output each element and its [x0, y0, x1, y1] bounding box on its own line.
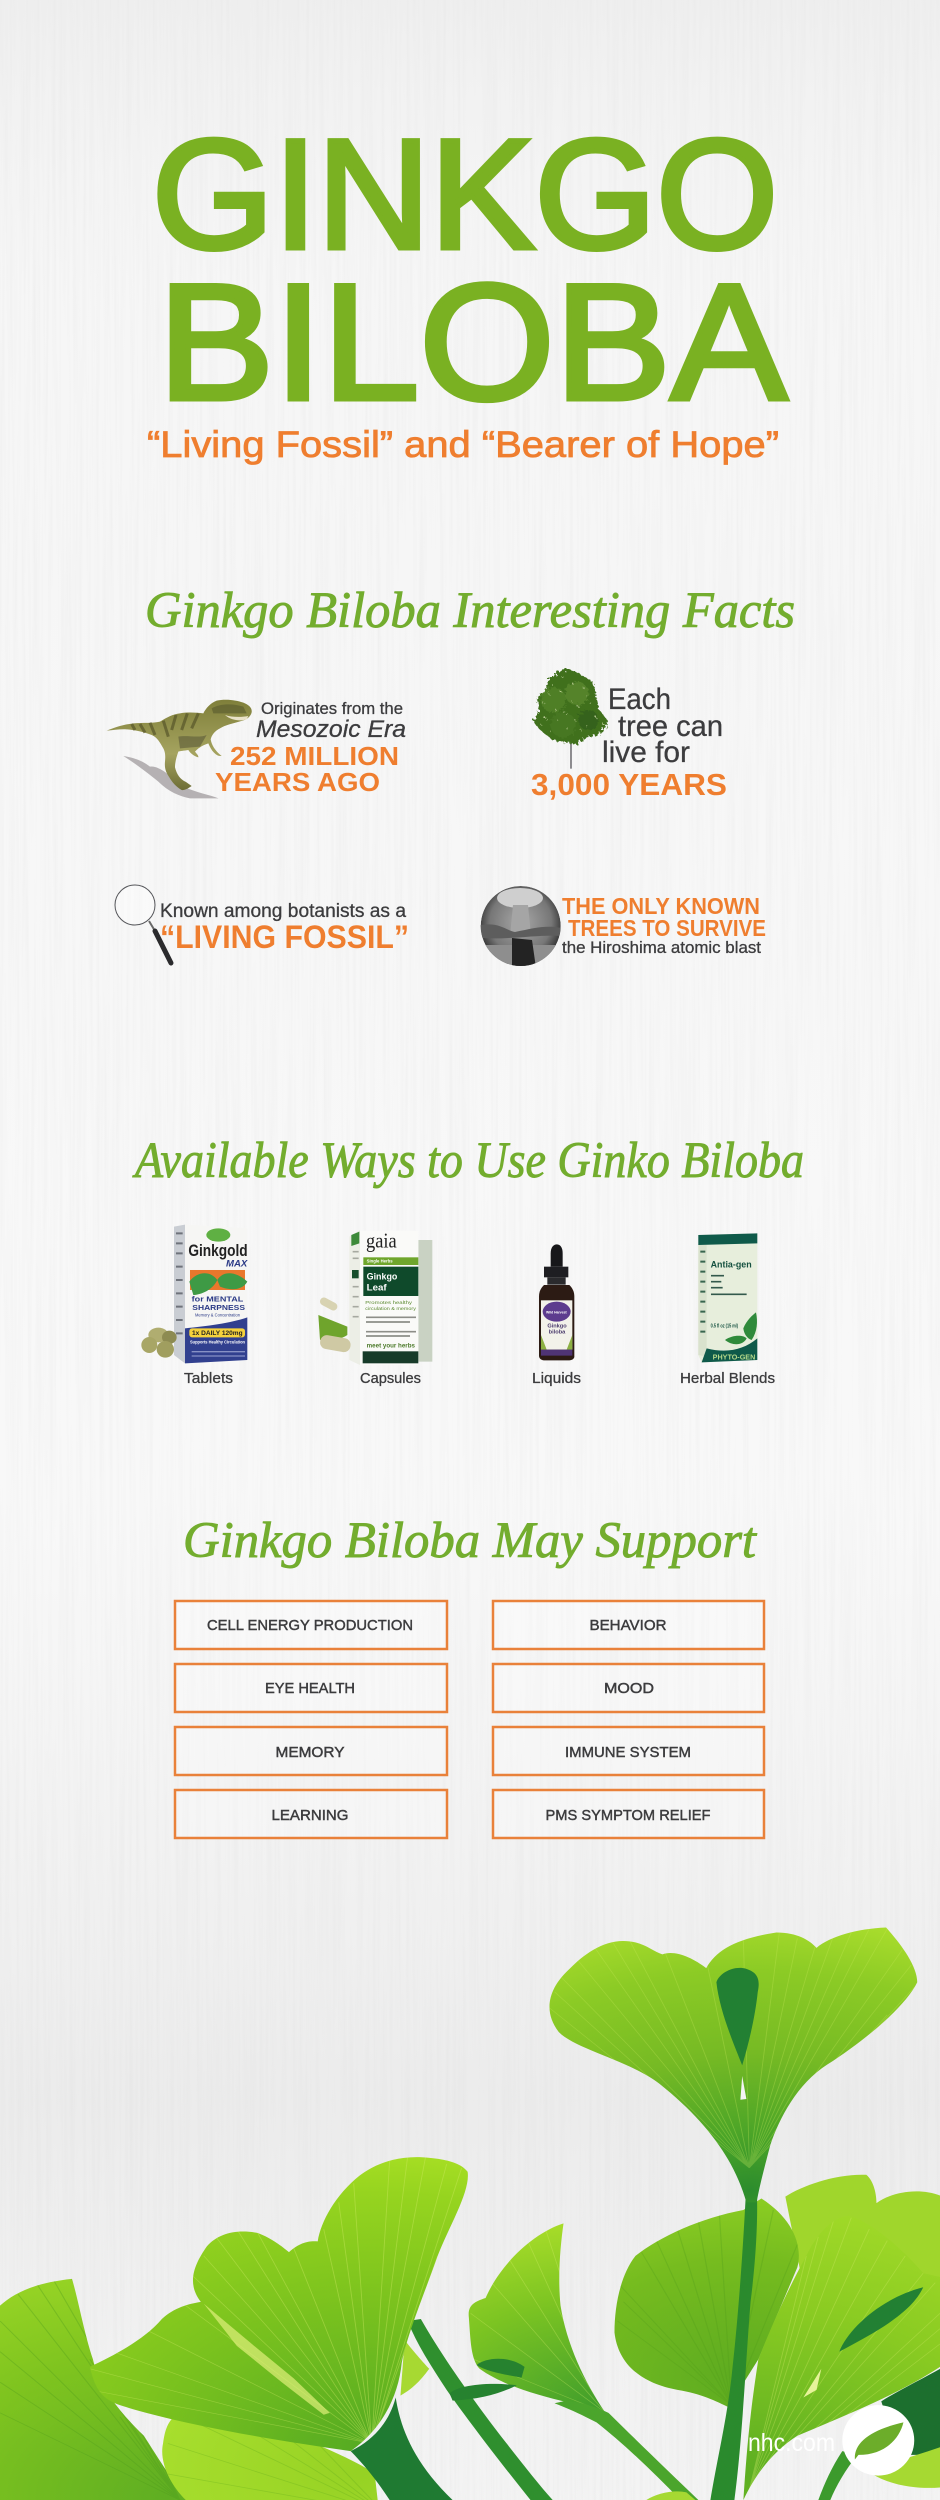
item: eye health	[175, 1664, 447, 1712]
heading: may support: Ginkgo Biloba May Support	[183, 1513, 758, 1569]
stem: long diagonal	[408, 2319, 553, 2500]
leaf: lower pale	[162, 2414, 384, 2500]
leaf: sliver behind big leaf	[400, 2340, 429, 2396]
petiole: lower right	[818, 2451, 857, 2500]
fact: 3,000 years	[531, 669, 727, 802]
icon: Gaia box: gaia	[366, 1230, 397, 1252]
fact text	[160, 901, 409, 955]
icon: Ginkgold box	[141, 1225, 248, 1363]
item: PMS symptom relief	[493, 1790, 764, 1838]
fact text: 252 MILLION	[230, 741, 399, 771]
icon: Ginkgold box: Memory & Concentration	[195, 1313, 241, 1318]
fact text: Known among botanists as a	[160, 901, 406, 922]
item: immune system	[493, 1727, 764, 1775]
item: eye health: EYE HEALTH	[265, 1680, 355, 1697]
fact text: YEARS AGO	[215, 767, 380, 797]
fact text: 3,000 YEARS	[531, 767, 727, 802]
icon: Gaia box: Ginkgo	[367, 1271, 398, 1281]
fact text: tree can	[618, 710, 723, 743]
item: behavior	[493, 1601, 764, 1649]
icon: Antia-gen box: Antia-gen	[711, 1260, 752, 1270]
fact text	[215, 699, 406, 797]
leaf: bottom fragment	[646, 2491, 695, 2500]
product: capsules	[318, 1230, 432, 1387]
title: GINKGO	[152, 108, 778, 282]
fact text: live for	[602, 736, 690, 769]
icon: Antia-gen box	[698, 1233, 757, 1362]
icon: magnifying glass	[115, 885, 171, 963]
item: learning: LEARNING	[272, 1807, 348, 1824]
product: herbal blends	[680, 1233, 775, 1387]
product: tablets	[141, 1225, 248, 1387]
heading: interesting facts: Ginkgo Biloba Interesting Facts	[145, 583, 795, 639]
item: cell energy production: CELL ENERGY PRODUCTION	[207, 1617, 413, 1634]
fact text: Mesozoic Era	[256, 716, 406, 743]
leaf: dark lower right	[881, 2369, 940, 2455]
ginkgo leaves illustration	[0, 1928, 940, 2500]
label: Tablets	[184, 1370, 233, 1387]
label: Herbal Blends	[680, 1370, 775, 1387]
item: learning	[175, 1790, 447, 1838]
leaf: top right	[549, 1928, 917, 2202]
leaf: bottom right tip	[866, 2447, 940, 2488]
logo: white circle with leaf	[842, 2405, 914, 2476]
leaf: middle right	[614, 2199, 799, 2407]
fact text	[531, 683, 727, 802]
icon: dropper bottle	[539, 1244, 574, 1360]
leaf: big centre-left	[90, 2156, 468, 2500]
item: immune system: IMMUNE SYSTEM	[565, 1744, 691, 1761]
icon: Gaia box: Leaf	[367, 1282, 388, 1292]
subtitle: “Living Fossil” and “Bearer of Hope”	[147, 424, 779, 465]
brand: nhc.com: nhc.com	[748, 2429, 835, 2457]
icon: Gaia box: circulation & memory	[365, 1306, 417, 1311]
leaf: back right	[785, 2175, 940, 2287]
item: mood: MOOD	[604, 1680, 654, 1697]
heading: available ways: Available Ways to Use Ginko Biloba	[132, 1133, 804, 1189]
icon: tree	[534, 669, 609, 769]
icon: atomic blast photo	[480, 886, 562, 970]
icon: Gaia box: Promotes healthy	[365, 1300, 413, 1305]
fact text: the Hiroshima atomic blast	[562, 938, 761, 957]
icon: Gaia box: meet your herbs	[367, 1342, 415, 1349]
product: liquids	[532, 1244, 581, 1387]
icon: Ginkgold box: for MENTAL	[192, 1295, 244, 1304]
fact text: THE ONLY KNOWN	[562, 893, 760, 919]
leaf: small centre	[450, 2223, 698, 2500]
item: cell energy production	[175, 1601, 447, 1649]
fact: living fossil	[115, 885, 409, 963]
fact text	[562, 893, 766, 957]
fact text: TREES TO SURVIVE	[568, 915, 766, 941]
icon: dropper bottle: Wild Harvest	[546, 1310, 567, 1315]
fact text: Originates from the	[261, 699, 403, 718]
item: mood	[493, 1664, 764, 1712]
item: behavior: BEHAVIOR	[590, 1617, 667, 1634]
icon: dropper bottle: Ginkgo	[547, 1323, 567, 1329]
fact: Mesozoic Era	[107, 699, 406, 798]
icon: Ginkgold box: Ginkgold	[188, 1241, 248, 1260]
icon: Ginkgold box: Supports Healthy Circulation	[190, 1339, 245, 1344]
item: memory	[175, 1727, 447, 1775]
leaf: front right	[743, 2216, 940, 2500]
panel: support list	[175, 1601, 764, 1838]
title	[152, 108, 787, 434]
fact text: Each	[608, 683, 671, 716]
icon: Ginkgold box: SHARPNESS	[192, 1303, 245, 1312]
label: Liquids	[532, 1370, 581, 1387]
title: BILOBA	[158, 250, 787, 434]
icon: Ginkgold box: 1x DAILY 120mg	[192, 1331, 243, 1337]
fact text: “LIVING FOSSIL”	[160, 919, 409, 955]
leaf: far left	[0, 2279, 192, 2500]
fact: Hiroshima	[480, 886, 766, 970]
icon: Ginkgold box: MAX	[226, 1259, 248, 1269]
icon: dropper bottle: biloba	[549, 1330, 566, 1336]
icon: Antia-gen box: PHYTO-GEN	[713, 1352, 755, 1361]
stem: main right	[710, 2183, 757, 2500]
icon: dinosaur	[107, 700, 252, 798]
icon: Antia-gen box: 0.5 fl oz (15 ml)	[711, 1323, 738, 1329]
icon: Gaia box: Single Herbs	[367, 1259, 393, 1264]
item: memory: MEMORY	[276, 1744, 344, 1761]
item: PMS symptom relief: PMS SYMPTOM RELIEF	[546, 1807, 710, 1824]
icon: Gaia box	[318, 1230, 432, 1365]
label: Capsules	[360, 1370, 421, 1387]
